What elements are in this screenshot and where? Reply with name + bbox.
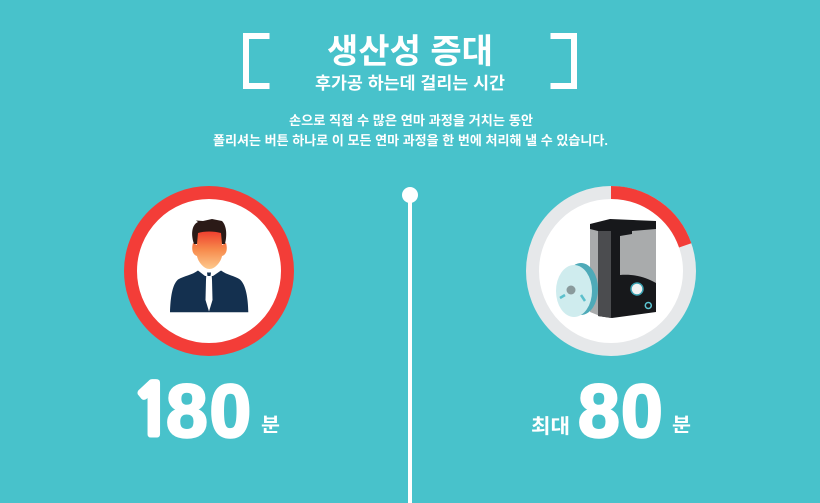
stat: up to 80 minutes xyxy=(531,369,691,453)
header xyxy=(213,33,608,148)
title: 생산성 증대 xyxy=(327,33,493,71)
red ring xyxy=(130,192,288,350)
stat: 180 minutes: 80 xyxy=(166,369,251,453)
description: 손으로 직접 수 많은 연마 과정을 거치는 동안 xyxy=(289,113,533,128)
stat: 180 minutes xyxy=(131,369,280,453)
panel: polisher xyxy=(531,192,691,453)
progress ring xyxy=(532,192,690,350)
stat: up to 80 minutes: 최대 xyxy=(531,415,570,438)
description: 폴리셔는 버튼 하나로 이 모든 연마 과정을 한 번에 처리해 낼 수 있습니다. xyxy=(213,133,608,148)
subtitle: 후가공 하는데 걸리는 시간 xyxy=(315,74,505,93)
right bracket xyxy=(550,36,574,86)
icon: polisher machine xyxy=(556,219,656,318)
left bracket xyxy=(246,36,270,86)
center divider xyxy=(402,187,418,503)
stat: 180 minutes: 1 xyxy=(131,377,173,446)
stat: 180 minutes: 분 xyxy=(261,415,280,436)
stat: up to 80 minutes: 분 xyxy=(672,415,691,436)
panel: manual xyxy=(130,192,288,453)
icon: man xyxy=(170,219,248,312)
description xyxy=(213,113,608,148)
stat: up to 80 minutes: 80 xyxy=(578,369,663,453)
